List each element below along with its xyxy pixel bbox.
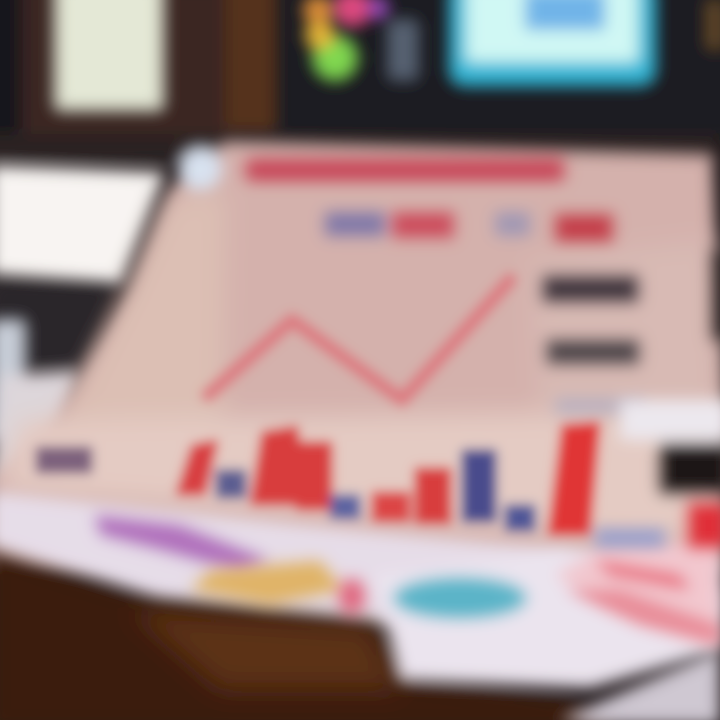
icon: colour wheel on screen [304,0,418,80]
side text blocks [543,276,645,414]
title [245,158,565,182]
left side white paper and dark objects [0,135,720,490]
paper: yellow note [190,560,366,614]
bar chart [36,422,600,535]
paper: lavender sheet [0,492,720,625]
paper: pink sheet [555,503,720,650]
line chart [208,280,510,400]
poster sheet [0,142,720,570]
monitor screen [450,0,655,85]
paper: lower right corner [560,650,720,720]
paper: white sheet with teal label [375,550,720,688]
background: window and monitors [0,0,720,145]
dark clip at right edge [620,250,720,493]
subtitle band [325,212,613,242]
icon: round badge [178,146,222,190]
desk [0,550,620,720]
